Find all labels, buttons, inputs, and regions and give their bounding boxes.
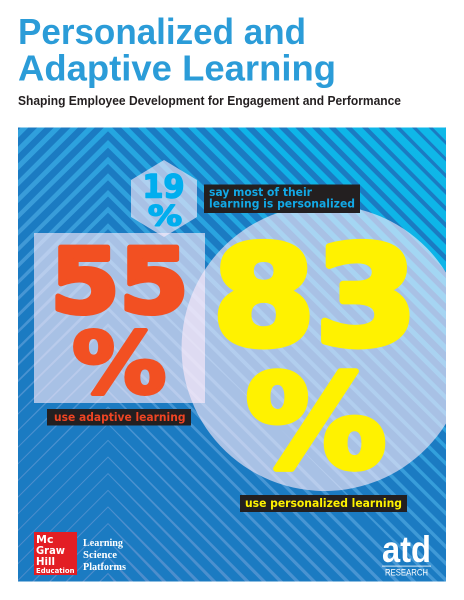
stat: 19%: 19	[142, 167, 184, 205]
stat: 55%: %	[72, 315, 166, 414]
text: Learning Science Platforms	[83, 538, 126, 573]
panel: translucent circle behind 83%	[182, 205, 446, 491]
text: Learning Science Platforms: Science	[83, 550, 118, 561]
stat: 55%: 55	[50, 229, 188, 333]
logo: McGraw Hill Education: Graw	[36, 544, 65, 557]
text: Learning Science Platforms: Platforms	[83, 562, 126, 573]
logo: McGraw Hill Education: Education	[36, 567, 75, 575]
logo: McGraw Hill Education	[34, 532, 77, 575]
logo: McGraw Hill Education: Hill	[36, 555, 55, 568]
title: Personalized and	[18, 11, 306, 52]
stat: 19%	[142, 167, 184, 232]
panel: translucent hexagon behind 19%	[131, 160, 197, 237]
text: Learning Science Platforms: Learning	[83, 538, 123, 549]
stat: 19%: %	[148, 199, 182, 232]
title	[18, 11, 336, 88]
callout: use personalized learning: use personalized learning	[245, 496, 402, 510]
callout: say most of their learning is personalized: learning is personalized	[209, 196, 355, 210]
callout: say most of their learning is personalized: say most of their	[209, 185, 312, 199]
callout: use adaptive learning: use adaptive learning	[54, 410, 186, 424]
panel: striped blue background	[18, 128, 446, 582]
stat: 55%	[50, 229, 188, 414]
stat: 83%: %	[246, 348, 386, 498]
logo: ATD Research: RESEARCH	[385, 568, 428, 578]
logo: McGraw Hill Education: Mc	[36, 533, 53, 546]
subtitle: Shaping Employee Development for Engagement and Performance	[18, 94, 401, 108]
stat: 83%	[212, 218, 418, 498]
stat: 83%: 83	[212, 218, 418, 377]
panel: translucent square behind 55%	[34, 233, 205, 403]
callout: say most of their learning is personalized	[204, 184, 360, 213]
title: Adaptive Learning	[18, 48, 336, 88]
logo: ATD Research: atd	[382, 529, 431, 570]
